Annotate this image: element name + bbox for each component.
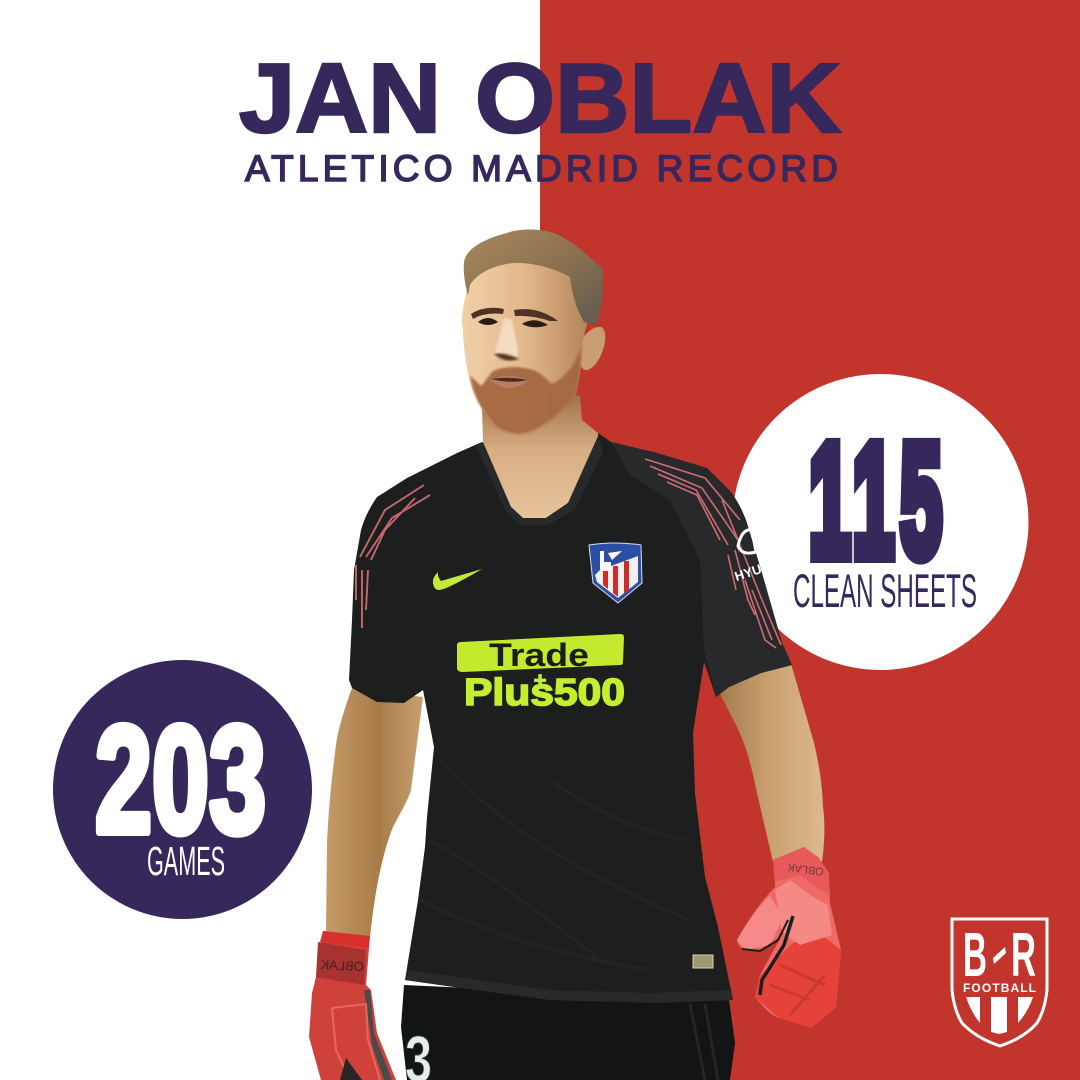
shorts <box>401 985 735 1080</box>
nose <box>495 318 518 358</box>
shirt <box>349 433 792 1003</box>
logo letter R: R <box>1011 921 1036 990</box>
sponsor word: trade: Trade <box>489 637 589 673</box>
logo: B/R football shield <box>952 919 1047 1046</box>
title <box>239 43 841 153</box>
beard <box>470 347 581 434</box>
icon: club crest <box>589 543 642 603</box>
face <box>462 258 588 434</box>
eyes <box>478 318 548 327</box>
subtitle: ATLETICO MADRID RECORD <box>245 148 838 189</box>
background: white left half <box>0 0 540 1080</box>
logo stripes <box>966 997 1033 1034</box>
neck <box>478 395 598 518</box>
sponsor word: plus500: Plus500 <box>464 672 625 714</box>
shirt maker patch <box>693 955 713 968</box>
right glove <box>737 847 841 1028</box>
ear <box>580 327 605 370</box>
left arm <box>326 688 423 937</box>
right glove: OBLAK <box>786 860 825 877</box>
hair <box>464 230 603 325</box>
logo wordmark: FOOTBALL <box>963 981 1036 995</box>
left glove <box>309 931 396 1080</box>
stat circle: games <box>53 660 312 919</box>
left glove: OBLAK <box>320 957 364 974</box>
title: OBLAK <box>475 43 841 153</box>
title: JAN <box>239 43 441 153</box>
logo letter B: B <box>963 921 987 990</box>
stat number: 115: 115 <box>809 412 942 590</box>
background: red right half <box>540 0 1080 1080</box>
icon: nike swoosh <box>433 569 482 590</box>
stat number: 203: 203 <box>95 695 266 865</box>
logo slash <box>993 947 1006 964</box>
player illustration <box>309 230 841 1080</box>
head <box>462 230 605 434</box>
sponsor badge <box>457 634 625 714</box>
shirt sleeve stripes <box>645 459 781 648</box>
right arm <box>712 660 824 862</box>
sponsor patch: sleeve: HYU <box>733 561 763 584</box>
sponsor plus sign: + <box>534 668 546 693</box>
mouth <box>490 376 529 388</box>
eyebrows <box>471 308 558 321</box>
stat label: games: GAMES <box>147 838 225 884</box>
stat circle: clean sheets <box>732 374 1028 670</box>
sponsor patch: sleeve <box>733 530 763 584</box>
